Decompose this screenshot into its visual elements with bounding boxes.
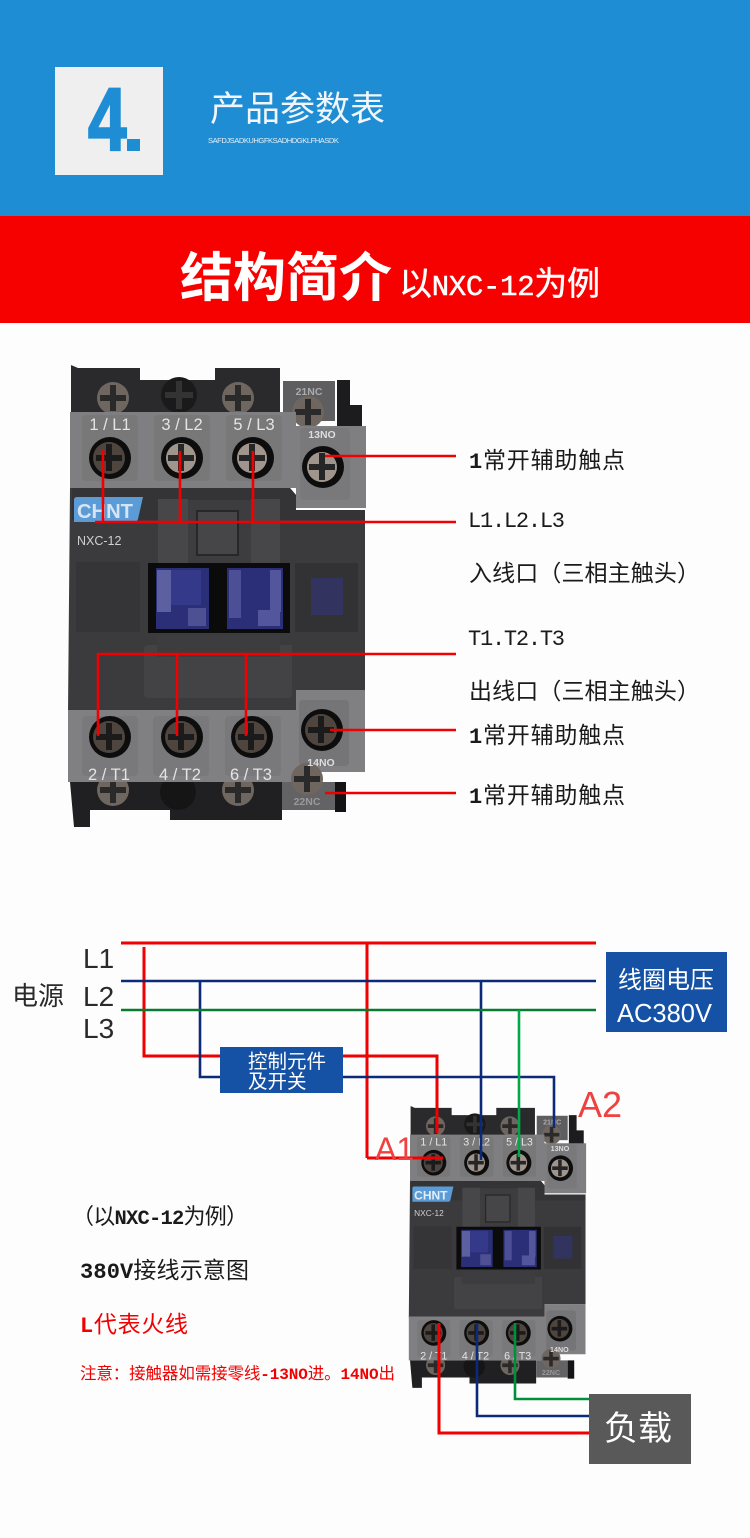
load box: 负载 [604, 1401, 672, 1450]
contactor photo: NXC-12 [77, 534, 122, 548]
header band [0, 0, 750, 216]
small contactor photo: 21NC [543, 1117, 562, 1126]
label A1: A1 [375, 1131, 414, 1167]
main title: 结构简介 [180, 236, 392, 312]
callout labels: 入线口（三相主触头） [469, 561, 700, 588]
power source labels: L1 [83, 943, 114, 974]
callout labels: L1.L2.L3 [468, 509, 565, 534]
contactor photo: 4 / T2 [159, 766, 201, 784]
coil voltage box [606, 952, 727, 1032]
small contactor photo: 5 / L3 [506, 1137, 533, 1149]
contactor photo: 3 / L2 [161, 416, 203, 434]
small contactor photo: 22NC [542, 1368, 561, 1377]
wiring notes: L代表火线 [80, 1312, 188, 1339]
small contactor photo: 3 / L2 [463, 1137, 490, 1149]
contactor photo [68, 365, 366, 827]
power source labels [12, 943, 114, 1044]
contactor photo: 6 / T3 [230, 766, 272, 784]
contactor photo: 21NC [296, 386, 323, 398]
label A2: A2 [578, 1084, 622, 1125]
contactor photo: 13NO [308, 429, 336, 441]
title note: 以NXC-12为例 [399, 266, 600, 305]
small contactor photo [409, 1106, 586, 1388]
load box [589, 1394, 691, 1464]
callout labels [468, 448, 700, 810]
contactor photo: 2 / T1 [88, 766, 130, 784]
callout labels: T1.T2.T3 [468, 627, 565, 652]
callout labels: 出线口（三相主触头） [469, 679, 700, 706]
callout labels: 1常开辅助触点 [469, 723, 625, 750]
wiring notes: （以NXC-12为例） [72, 1205, 248, 1231]
section title: 产品参数表 [210, 81, 385, 132]
small contactor photo: 4 / T2 [462, 1351, 489, 1363]
contactor photo: 5 / L3 [233, 416, 275, 434]
wiring diagram [12, 943, 727, 1464]
wiring notes: 注意：接触器如需接零线-13NO进。14NO出 [80, 1364, 395, 1384]
section subtitle: SAFDJSADKUHGFKSADHDGKLFHASDK [208, 136, 339, 145]
control element box: 及开关 [248, 1065, 307, 1094]
control element box [220, 1045, 343, 1094]
number badge [55, 67, 163, 175]
callout labels: 1常开辅助触点 [469, 783, 625, 810]
small contactor photo: 13NO [551, 1144, 570, 1153]
wiring notes: 380V接线示意图 [80, 1258, 249, 1285]
contactor photo: 22NC [294, 796, 321, 808]
coil voltage box: 线圈电压 [618, 960, 714, 995]
small contactor photo: 2 / T1 [420, 1351, 447, 1363]
red title band [0, 216, 750, 323]
callout labels: 1常开辅助触点 [469, 448, 625, 475]
control element box: 控制元件 [248, 1045, 326, 1074]
contactor photo: 1 / L1 [89, 416, 131, 434]
power source labels: 电源 [12, 976, 64, 1013]
contactor photo: 14NO [307, 757, 335, 769]
coil voltage box: AC380V [617, 1000, 712, 1028]
small contactor photo: 1 / L1 [420, 1137, 447, 1149]
wires [121, 943, 596, 1433]
power source labels: L3 [83, 1013, 114, 1044]
small contactor photo: 14NO [550, 1345, 569, 1354]
small contactor photo: 6 / T3 [504, 1351, 531, 1363]
wiring notes [72, 1205, 395, 1384]
callout lines [95, 449, 456, 793]
contactor photo: CHNT [77, 501, 133, 523]
small contactor photo: NXC-12 [414, 1208, 444, 1218]
contactor photo with callouts [68, 365, 700, 827]
number badge: 4 [88, 70, 127, 169]
small contactor photo: CHNT [414, 1188, 448, 1202]
power source labels: L2 [83, 981, 114, 1012]
